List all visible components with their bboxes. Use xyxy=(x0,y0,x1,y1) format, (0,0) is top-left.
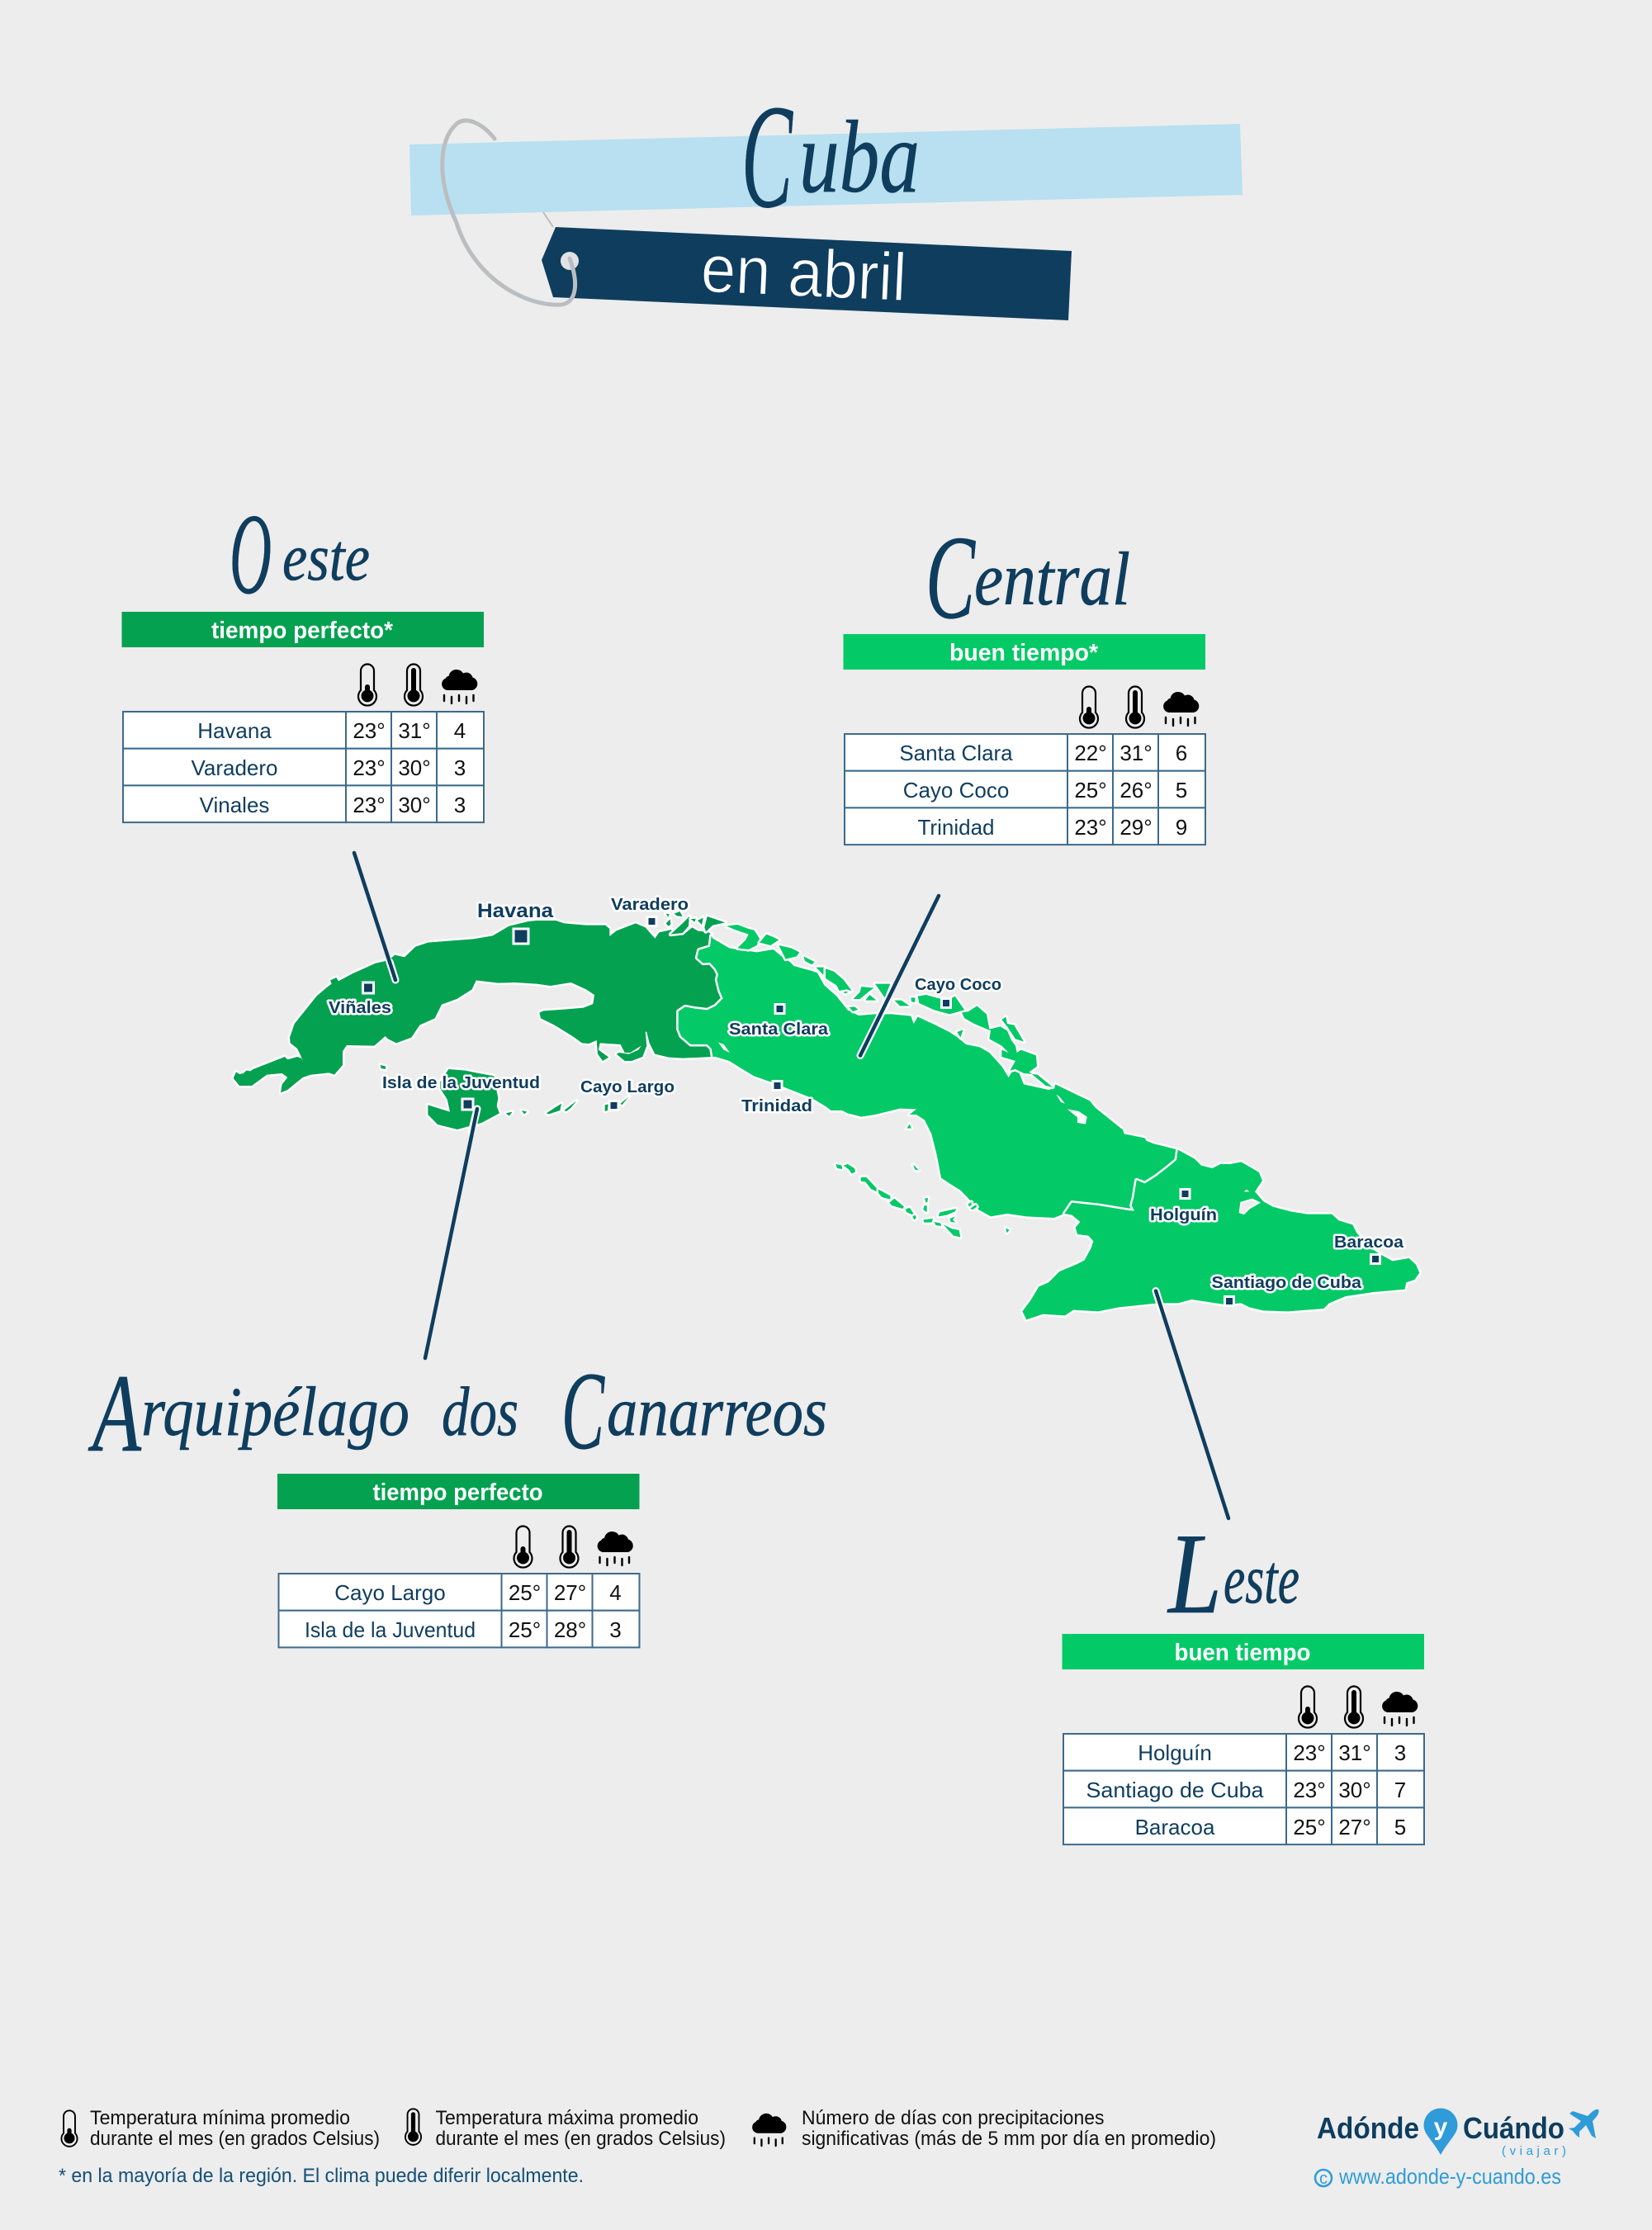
table: Leste: Holguín xyxy=(1138,1740,1212,1765)
logo: Cuándo xyxy=(1463,2111,1564,2145)
legend: min temperature: Temperatura mínima promedio xyxy=(90,2107,350,2129)
footnote: * en la mayoría de la región. El clima puede diferir localmente. xyxy=(59,2165,584,2187)
heading: Arquipélago dos Canarreos: dos xyxy=(442,1373,518,1451)
title tag: en abril: en abril xyxy=(699,231,908,315)
leader line: Leste xyxy=(1156,1291,1228,1518)
table: Leste: 30° xyxy=(1338,1778,1371,1802)
legend: max temperature: durante el mes (en grados Celsius) xyxy=(436,2128,726,2150)
table: Leste: 5 xyxy=(1394,1815,1406,1839)
panel: Arquipélago dos Canarreos xyxy=(277,1474,639,1647)
legend: rain days xyxy=(752,2107,1216,2150)
table: Arquipélago dos Canarreos: 25° xyxy=(509,1580,541,1605)
region: Central xyxy=(679,925,1178,1218)
leader line: Arquipélago xyxy=(425,1109,477,1358)
Isla de la Juventud xyxy=(428,1069,499,1129)
table: Leste: 25° xyxy=(1293,1815,1326,1839)
legend: min temperature: durante el mes (en grados Celsius) xyxy=(90,2128,380,2150)
city labels: Cayo Largo xyxy=(580,1078,675,1096)
table: Arquipélago dos Canarreos: Isla de la Juventud xyxy=(305,1617,476,1642)
leader line: Central xyxy=(860,896,939,1055)
table: Central: 9 xyxy=(1176,815,1187,840)
region: Oeste xyxy=(234,921,723,1129)
panel: Arquipélago dos Canarreos: tiempo perfecto xyxy=(373,1480,543,1506)
table: Oeste: Varadero xyxy=(191,755,278,780)
keys: Jardines de la Reina xyxy=(835,1164,1010,1237)
city labels: Cayo Coco xyxy=(915,976,1001,994)
table: Oeste: 30° xyxy=(398,755,431,780)
panel: Leste: buen tiempo xyxy=(1174,1640,1311,1666)
table: Central: 29° xyxy=(1119,815,1153,840)
panel: Oeste xyxy=(122,612,484,822)
icon: max temperature xyxy=(1126,687,1144,728)
legend: max temperature: Temperatura máxima promedio xyxy=(436,2107,698,2129)
heading: Arquipélago dos Canarreos: anarreos xyxy=(607,1373,827,1451)
city labels: Trinidad xyxy=(741,1097,812,1115)
icon: location pin: y xyxy=(1434,2114,1448,2141)
website: c xyxy=(1319,2170,1328,2188)
icon: min temperature xyxy=(1299,1686,1317,1728)
icon: rain xyxy=(1382,1692,1418,1726)
table: Arquipélago dos Canarreos xyxy=(279,1574,639,1647)
table: Leste: 23° xyxy=(1293,1778,1326,1802)
table: Arquipélago dos Canarreos: 3 xyxy=(609,1617,622,1642)
heading: Leste: L xyxy=(1167,1510,1222,1638)
city labels xyxy=(329,896,1404,1292)
table: Central: 26° xyxy=(1119,778,1153,803)
table: Arquipélago dos Canarreos: 28° xyxy=(554,1617,586,1642)
table: Oeste: 23° xyxy=(353,793,386,817)
table: Central: 25° xyxy=(1074,778,1107,803)
city labels: Santiago de Cuba xyxy=(1212,1274,1362,1292)
heading: Arquipélago dos Canarreos: A xyxy=(88,1352,141,1475)
icon: max temperature xyxy=(405,664,423,706)
keys: Varadero and Cayo Largo xyxy=(547,911,725,1114)
leader line: Oeste xyxy=(354,853,395,980)
table: Central: 23° xyxy=(1074,815,1107,840)
icon: min temperature xyxy=(1080,687,1098,728)
panel: Oeste: tiempo perfecto* xyxy=(211,618,394,644)
table: Oeste: 30° xyxy=(398,793,431,817)
table: Central: Cayo Coco xyxy=(903,778,1009,803)
city labels: Holguín xyxy=(1150,1206,1217,1224)
table: Leste: 3 xyxy=(1394,1740,1406,1765)
heading: Central xyxy=(925,512,1130,644)
table: Central: 31° xyxy=(1119,741,1153,765)
table: Oeste: 31° xyxy=(398,718,431,743)
heading: Arquipélago dos Canarreos: rquipélago xyxy=(141,1373,409,1451)
icon: plane xyxy=(1569,2109,1599,2138)
city labels: Havana xyxy=(477,900,554,922)
heading: Leste xyxy=(1167,1510,1299,1638)
city labels: Santa Clara xyxy=(729,1020,829,1039)
city labels: Viñales xyxy=(329,999,391,1017)
heading: Arquipélago dos Canarreos: C xyxy=(561,1350,605,1473)
table: Central: 6 xyxy=(1176,741,1187,765)
city labels: Isla de la Juventud xyxy=(382,1074,540,1092)
logo xyxy=(1315,2109,1599,2189)
table: Oeste: 4 xyxy=(454,718,466,743)
logo: Adónde xyxy=(1317,2111,1419,2145)
table: Oeste xyxy=(123,712,484,822)
legend: rain days: Número de días con precipitaciones xyxy=(802,2107,1105,2129)
table: Leste: Santiago de Cuba xyxy=(1086,1778,1264,1802)
title tag: en abril xyxy=(443,121,1072,320)
table: Arquipélago dos Canarreos: 25° xyxy=(509,1617,541,1642)
table: Central: Trinidad xyxy=(918,815,994,840)
table: Leste: 23° xyxy=(1293,1740,1326,1765)
map of Cuba xyxy=(234,896,1419,1319)
table: Leste: 31° xyxy=(1338,1740,1371,1765)
website: www.adonde-y-cuando.es xyxy=(1338,2164,1561,2189)
table: Leste xyxy=(1063,1734,1424,1844)
legend: min temperature xyxy=(61,2107,380,2150)
city labels: Baracoa xyxy=(1334,1233,1404,1252)
panel: Leste xyxy=(1062,1634,1424,1844)
icon: location pin xyxy=(1423,2109,1458,2155)
legend: rain days: significativas (más de 5 mm por día en promedio) xyxy=(802,2128,1216,2150)
heading: Oeste: este xyxy=(282,522,370,594)
icon: rain xyxy=(598,1532,633,1565)
heading: Oeste: O xyxy=(230,490,272,618)
table: Oeste: 3 xyxy=(454,793,466,817)
heading: Leste: este xyxy=(1224,1541,1299,1618)
icon: rain xyxy=(1163,692,1199,726)
table: Oeste: 23° xyxy=(353,718,386,743)
heading: Arquipélago dos Canarreos xyxy=(88,1350,827,1475)
panel: Central: buen tiempo* xyxy=(949,640,1099,666)
table: Central: 22° xyxy=(1074,741,1107,765)
table: Arquipélago dos Canarreos: 4 xyxy=(609,1580,622,1605)
icon: min temperature xyxy=(514,1526,532,1568)
icon: max temperature xyxy=(1345,1686,1363,1728)
table: Oeste: Vinales xyxy=(200,793,269,817)
title banner: Cuba xyxy=(409,74,1243,239)
table: Central: Santa Clara xyxy=(899,741,1013,765)
table: Oeste: 23° xyxy=(353,755,386,780)
icon: rain xyxy=(442,670,477,703)
heading: Central: entral xyxy=(974,537,1130,621)
icon: max temperature xyxy=(560,1526,578,1568)
table: Oeste: Havana xyxy=(197,718,272,743)
table: Leste: Baracoa xyxy=(1135,1815,1215,1839)
city labels: Varadero xyxy=(611,896,689,914)
table: Leste: 27° xyxy=(1338,1815,1371,1839)
title banner: Cuba: C xyxy=(741,74,793,239)
legend: max temperature xyxy=(405,2107,726,2150)
city markers xyxy=(363,916,1380,1306)
table: Arquipélago dos Canarreos: Cayo Largo xyxy=(334,1580,446,1605)
heading: Central: C xyxy=(925,512,976,644)
panel: Central xyxy=(844,634,1205,845)
table: Central xyxy=(845,734,1205,845)
table: Leste: 7 xyxy=(1394,1778,1406,1802)
region: Leste xyxy=(1022,1150,1419,1319)
title banner: Cuba: uba xyxy=(799,101,920,215)
table: Oeste: 3 xyxy=(454,755,466,780)
table: Central: 5 xyxy=(1176,778,1187,803)
icon: min temperature xyxy=(358,664,376,706)
heading: Oeste xyxy=(230,490,370,618)
logo: ( v i a j a r ) xyxy=(1502,2144,1566,2158)
table: Arquipélago dos Canarreos: 27° xyxy=(554,1580,586,1605)
